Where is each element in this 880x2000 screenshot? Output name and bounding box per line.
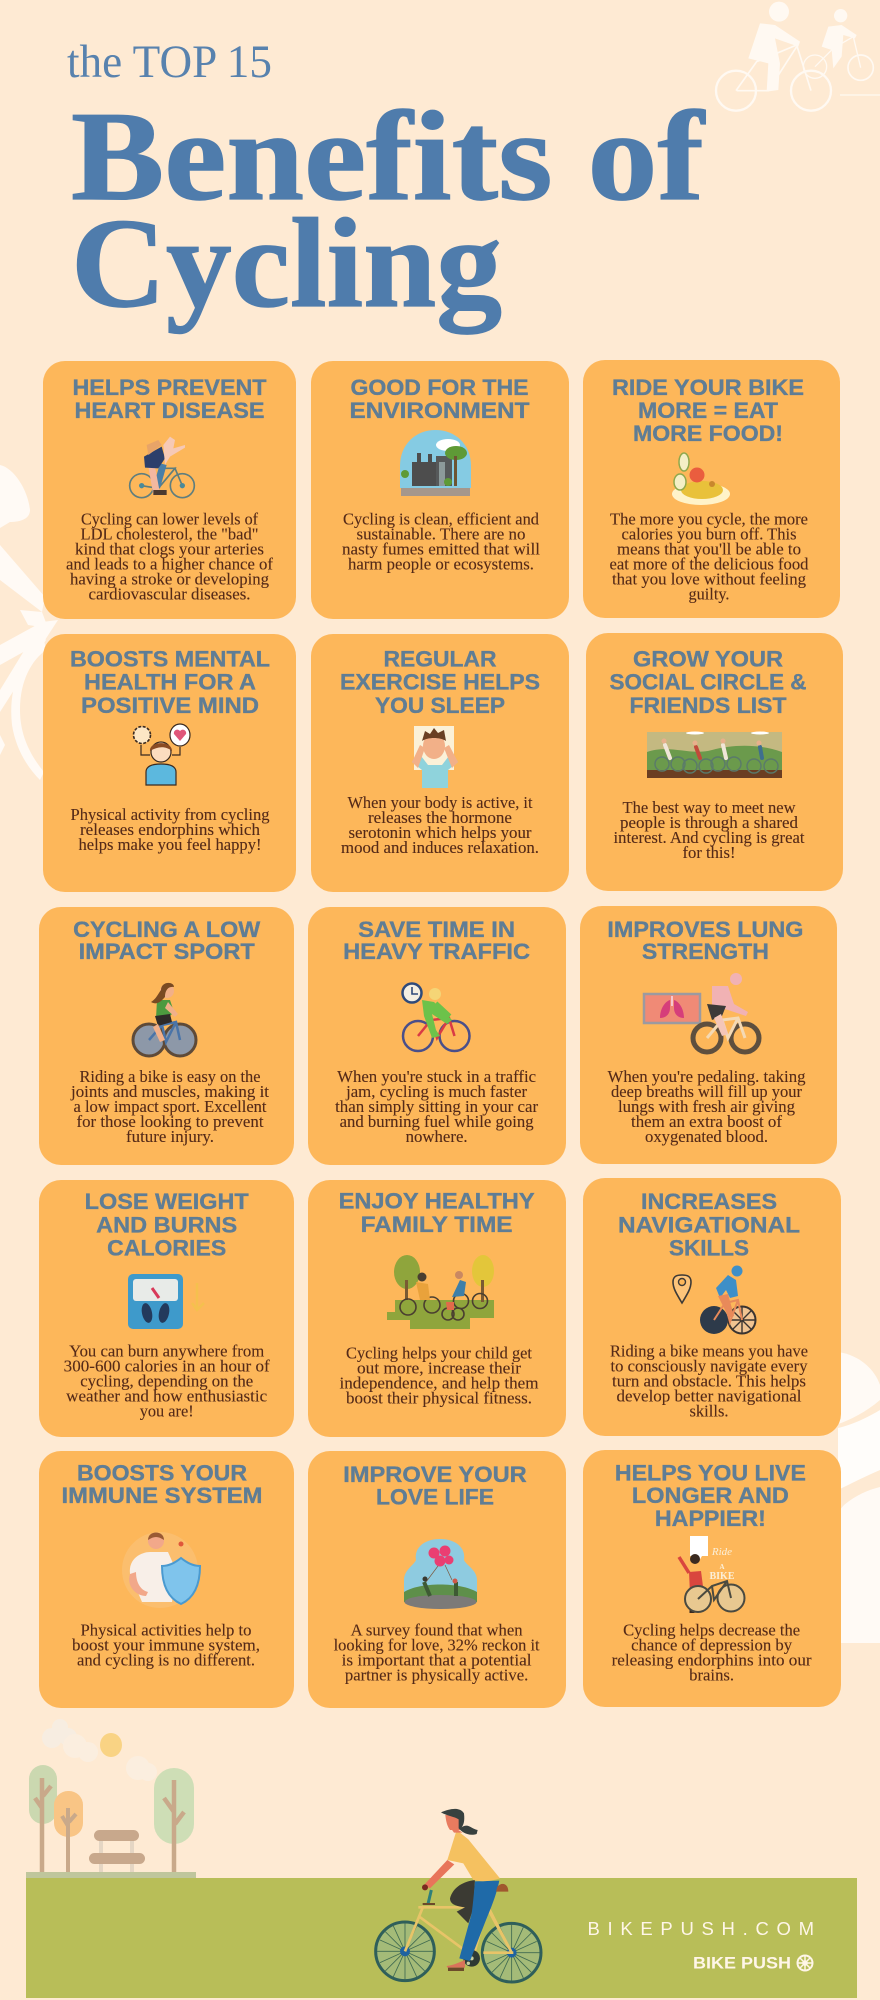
icon: woman cyclist	[133, 983, 196, 1056]
heading: HELPS YOU LIVE	[615, 1461, 806, 1486]
body text: When you're pedaling. taking	[608, 1067, 806, 1086]
body text: Cycling can lower levels of	[81, 510, 258, 528]
body text: to consciously navigate every	[610, 1356, 808, 1375]
heading: HEAVY TRAFFIC	[343, 939, 530, 964]
body text: A survey found that when	[351, 1621, 523, 1640]
body text: The more you cycle, the more	[610, 510, 808, 528]
panel: increases navigational skills	[583, 1178, 841, 1436]
body text: eat more of the delicious food	[610, 554, 809, 574]
panel: helps you live longer and happier	[583, 1450, 841, 1707]
body text: people is through a shared	[620, 813, 798, 832]
body text	[610, 1341, 808, 1420]
heading: ENJOY HEALTHY	[339, 1189, 535, 1214]
body text: nowhere.	[406, 1127, 468, 1146]
body text: cardiovascular diseases.	[88, 584, 250, 604]
icon: couple with heart balloons	[404, 1539, 477, 1609]
panel: ride your bike more eat more food	[583, 360, 840, 618]
heading	[343, 917, 530, 964]
body text: releases endorphins which	[80, 820, 260, 839]
heading: HEART DISEASE	[74, 398, 264, 423]
text: website: BIKEPUSH.COM	[588, 1918, 814, 1939]
panel: enjoy healthy family time	[308, 1180, 566, 1437]
heading	[615, 1461, 806, 1531]
body text: and burning fuel while going	[340, 1112, 534, 1131]
body text: When your body is active, it	[348, 793, 533, 812]
heading: REGULAR	[384, 646, 497, 671]
body text: for this!	[682, 843, 736, 862]
body text: Physical activities help to	[80, 1621, 252, 1640]
title: Benefits of Cycling: Benefits of	[71, 85, 706, 227]
heading: IMPROVE YOUR	[343, 1462, 527, 1487]
body text	[341, 793, 539, 857]
body text: looking for love, 32% reckon it	[334, 1636, 540, 1655]
body text	[610, 510, 809, 604]
heading: IMPROVES LUNG	[607, 917, 803, 942]
title: Benefits of Cycling	[71, 85, 706, 334]
body text: independence, and help them	[340, 1374, 538, 1393]
icon: food plate	[672, 453, 730, 505]
body text	[66, 510, 273, 604]
icon: man with bike and speech bubble: A	[719, 1563, 725, 1571]
heading	[610, 646, 807, 718]
heading: FRIENDS LIST	[630, 693, 787, 718]
heading: LONGER AND	[632, 1483, 789, 1508]
heading: IMPACT SPORT	[79, 939, 255, 964]
panel: good for the environment	[311, 361, 569, 619]
panel: helps prevent heart disease	[43, 361, 296, 619]
body text: cycling, depending on the	[80, 1371, 253, 1390]
body text: joints and muscles, making it	[70, 1082, 269, 1101]
body text: kind that clogs your arteries	[75, 540, 264, 558]
heading	[72, 375, 267, 423]
body text: skills.	[690, 1401, 728, 1420]
icon: bathroom scale	[128, 1274, 204, 1329]
panel: improve your love life	[308, 1451, 566, 1708]
panel: boosts mental health	[43, 634, 296, 892]
body text: out more, increase their	[357, 1359, 521, 1378]
ground strip	[26, 1872, 196, 1879]
body text	[72, 1621, 260, 1670]
body text	[342, 510, 540, 574]
heading: YOU SLEEP	[375, 693, 505, 718]
panel: lose weight and burns calories	[39, 1180, 294, 1437]
body text	[64, 1341, 270, 1420]
body text: When you're stuck in a traffic	[337, 1067, 537, 1086]
icon: person with shield	[122, 1532, 200, 1608]
heading: SOCIAL CIRCLE &	[610, 670, 807, 695]
body text: Riding a bike is easy on the	[80, 1067, 260, 1086]
icon: group of cyclists scene	[647, 732, 782, 778]
body text: The best way to meet new	[622, 798, 796, 817]
body text: guilty.	[688, 584, 730, 604]
heading	[350, 375, 530, 423]
body text	[335, 1067, 538, 1146]
icon: bike wheel logo	[798, 1956, 812, 1970]
body text: and cycling is no different.	[77, 1651, 255, 1670]
body text: is important that a potential	[342, 1651, 532, 1670]
heading: POSITIVE MIND	[81, 693, 259, 718]
body text: having a stroke or developing	[70, 570, 269, 588]
body text: boost their physical fitness.	[346, 1389, 532, 1408]
body text: releasing endorphins into our	[612, 1651, 812, 1670]
panel: boosts your immune system	[39, 1451, 294, 1708]
title: Benefits of Cycling: Cycling	[71, 192, 502, 334]
body text: nasty fumes emitted that will	[342, 540, 540, 558]
icon: sun	[100, 1733, 122, 1757]
body text: for those looking to prevent	[76, 1112, 264, 1131]
icon: woman riding bicycle	[376, 1809, 541, 1982]
body text: sustainable. There are no	[356, 524, 526, 544]
icon: lungs and cyclist	[644, 973, 759, 1052]
heading	[607, 917, 803, 964]
heading	[340, 646, 540, 718]
body text	[70, 1067, 269, 1146]
heading	[73, 917, 260, 964]
heading: GOOD FOR THE	[350, 375, 528, 400]
body text: oxygenated blood.	[645, 1127, 768, 1146]
icon: man with bike and speech bubble: Ride	[711, 1546, 732, 1558]
body text: Cycling helps your child get	[346, 1344, 532, 1363]
body text	[612, 1621, 812, 1685]
icon: clouds	[42, 1719, 157, 1781]
heading: CALORIES	[107, 1236, 226, 1261]
icon: park bench	[89, 1830, 145, 1872]
body text: and leads to a higher chance of	[66, 554, 273, 574]
heading: STRENGTH	[642, 939, 769, 964]
body text	[70, 805, 270, 854]
icon: older cyclist	[130, 437, 194, 498]
icon: clock and cyclist	[402, 984, 470, 1051]
heading: BOOSTS MENTAL	[70, 646, 270, 671]
watermark: large cyclist on left edge	[0, 465, 58, 780]
icon: man with bike and speech bubble	[679, 1536, 744, 1613]
heading: NAVIGATIONAL	[618, 1212, 800, 1238]
body text: them an extra boost of	[631, 1112, 782, 1131]
icon: factory dome	[400, 430, 471, 496]
body text: Riding a bike means you have	[610, 1341, 808, 1360]
heading: HELPS PREVENT	[72, 375, 267, 400]
body text: deep breaths will fill up your	[611, 1082, 802, 1101]
body text: partner is physically active.	[345, 1666, 528, 1685]
body text: Cycling is clean, efficient and	[343, 510, 539, 528]
body text: helps make you feel happy!	[78, 835, 262, 854]
heading: SAVE TIME IN	[358, 917, 515, 942]
heading: ENVIRONMENT	[350, 398, 530, 423]
heading	[85, 1189, 249, 1261]
body text: Physical activity from cycling	[70, 805, 270, 824]
heading	[612, 375, 804, 446]
heading: EXERCISE HELPS	[340, 670, 540, 695]
body text: interest. And cycling is great	[614, 828, 805, 847]
heading	[343, 1462, 527, 1510]
title: the TOP 15: the TOP 15	[67, 36, 272, 88]
body text: boost your immune system,	[72, 1636, 260, 1655]
watermark: white shape on right edge	[838, 1352, 880, 1643]
panel: save time in heavy traffic	[308, 907, 566, 1165]
icon: map pin and racing cyclist	[673, 1266, 756, 1334]
body text	[334, 1621, 540, 1685]
heading	[618, 1189, 800, 1261]
body text: a low impact sport. Excellent	[74, 1097, 267, 1116]
body text: turn and obstacle. This helps	[612, 1371, 806, 1390]
body text: serotonin which helps your	[348, 823, 532, 842]
icon: person with gear and heart	[134, 724, 190, 785]
body text: 300-600 calories in an hour of	[64, 1356, 270, 1375]
body text: future injury.	[126, 1127, 214, 1146]
text: brand: BIKE PUSH	[693, 1954, 791, 1973]
heading: HAPPIER!	[655, 1506, 766, 1531]
body text: LDL cholesterol, the "bad"	[80, 524, 258, 544]
icon: man in bed	[412, 726, 458, 788]
heading: CYCLING A LOW	[73, 917, 260, 942]
body text: Cycling helps decrease the	[623, 1621, 800, 1640]
heading: INCREASES	[641, 1189, 777, 1214]
heading: IMMUNE SYSTEM	[62, 1483, 262, 1508]
body text: that you love without feeling	[612, 570, 806, 588]
body text	[340, 1344, 538, 1408]
heading: MORE = EAT	[638, 398, 779, 423]
heading: MORE FOOD!	[633, 421, 783, 446]
body text: You can burn anywhere from	[69, 1341, 264, 1360]
body text: lungs with fresh air giving	[618, 1097, 795, 1116]
heading: RIDE YOUR BIKE	[612, 375, 804, 400]
body text: than simply sitting in your car	[335, 1097, 538, 1116]
body text: jam, cycling is much faster	[345, 1082, 527, 1101]
body text	[608, 1067, 806, 1146]
heading: AND BURNS	[96, 1212, 237, 1238]
body text: harm people or ecosystems.	[348, 554, 534, 574]
heading: LOVE LIFE	[376, 1485, 494, 1510]
footer park scene	[26, 1719, 857, 1998]
heading	[62, 1461, 262, 1508]
green ground	[26, 1878, 857, 1998]
heading: SKILLS	[669, 1236, 749, 1261]
icon: family cycling in park	[387, 1255, 494, 1329]
heading	[70, 646, 270, 718]
heading: GROW YOUR	[633, 646, 783, 671]
body text: calories you burn off. This	[622, 524, 796, 544]
icon: trees	[29, 1765, 194, 1873]
body text: weather and how enthusiastic	[66, 1386, 268, 1405]
icon: man with bike and speech bubble: BIKE	[709, 1571, 735, 1582]
heading: BOOSTS YOUR	[77, 1461, 247, 1486]
body text: brains.	[689, 1666, 734, 1685]
body text: releases the hormone	[368, 808, 512, 827]
panel: cycling a low impact sport	[39, 907, 294, 1165]
panel: grow your social circle	[586, 633, 843, 891]
heading: HEALTH FOR A	[84, 670, 256, 695]
body text	[614, 798, 805, 862]
heading	[339, 1189, 535, 1237]
body text: develop better navigational	[616, 1386, 802, 1405]
panel: regular exercise helps you sleep	[311, 634, 569, 892]
body text: chance of depression by	[631, 1636, 793, 1655]
body text: mood and induces relaxation.	[341, 838, 539, 857]
body text: means that you'll be able to	[617, 540, 801, 558]
panel: improves lung strength	[580, 906, 837, 1164]
heading: FAMILY TIME	[361, 1212, 513, 1237]
heading: LOSE WEIGHT	[85, 1189, 249, 1214]
body text: you are!	[140, 1401, 194, 1420]
watermark: tandem cyclists top right	[716, 2, 880, 111]
